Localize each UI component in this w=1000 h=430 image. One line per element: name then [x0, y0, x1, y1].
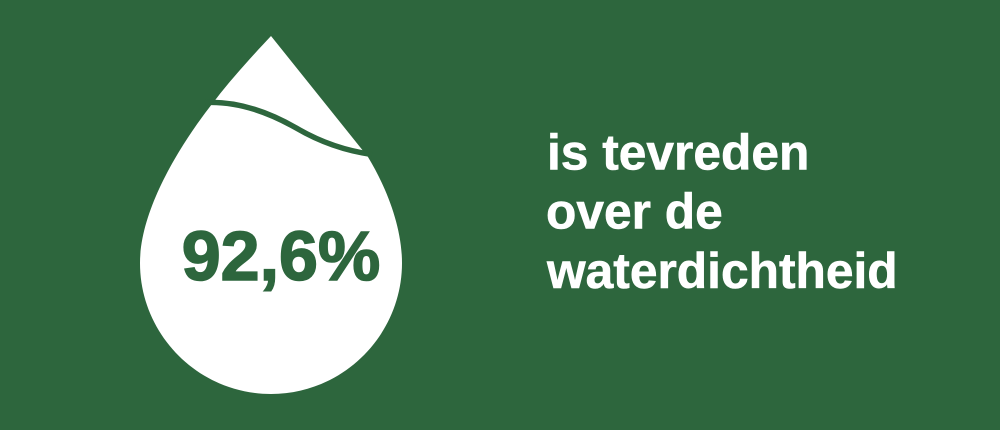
percentage value: 92,6% — [182, 217, 380, 295]
water level wave — [205, 102, 372, 154]
line 2: over de — [546, 184, 723, 240]
line 3: waterdichtheid — [546, 243, 898, 299]
line 1: is tevreden — [547, 124, 809, 180]
icon: water drop with percentage — [140, 36, 402, 394]
drop shape — [140, 36, 402, 394]
description text — [546, 124, 898, 299]
